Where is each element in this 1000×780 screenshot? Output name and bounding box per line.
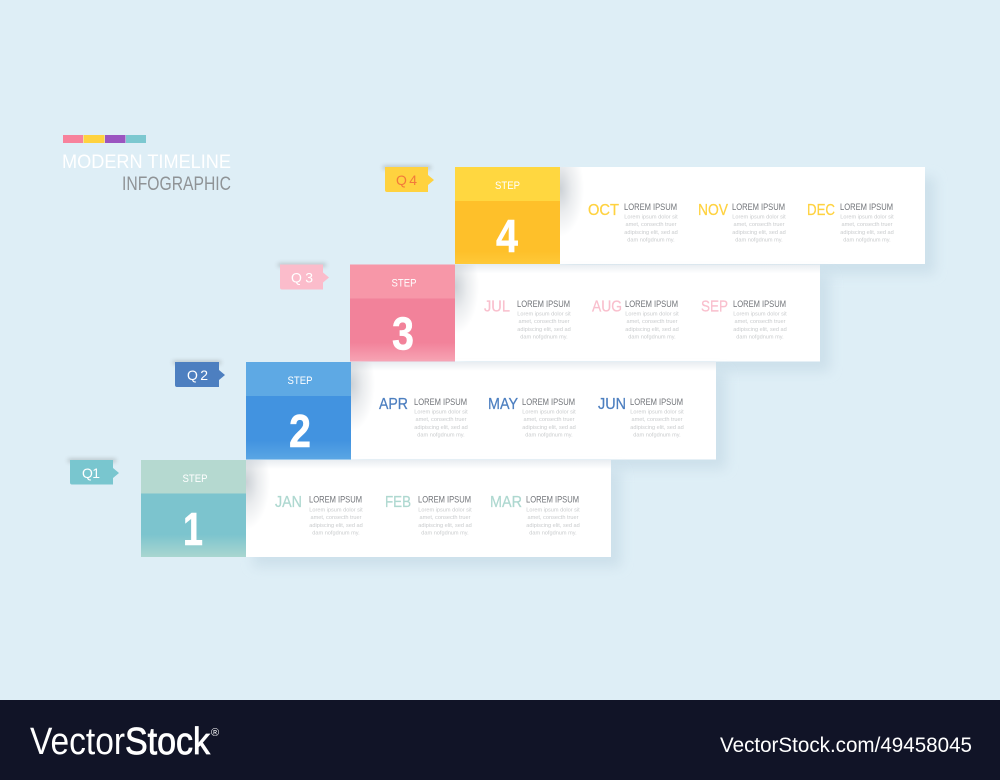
month: March: amet, consecth truer <box>528 515 579 521</box>
month: November: amet, consecth truer <box>734 222 785 228</box>
month: January: Lorem ipsum dolor sit <box>309 508 363 514</box>
month: July: LOREM IPSUM <box>517 299 570 309</box>
month: December: DEC <box>807 202 835 219</box>
month: July: adipiscing elit, sed ad <box>517 327 571 333</box>
month: October: dam nofgdnum my. <box>627 238 675 244</box>
step box shadow <box>560 167 580 228</box>
month: June: amet, consecth truer <box>632 417 683 423</box>
month: January: JAN <box>275 494 302 511</box>
month: February: dam nofgdnum my. <box>421 530 469 536</box>
month: September: Lorem ipsum dolor sit <box>733 312 787 318</box>
top edge shadow <box>246 460 611 469</box>
month: August: LOREM IPSUM <box>625 299 678 309</box>
month: July: Lorem ipsum dolor sit <box>517 312 571 318</box>
month: January: amet, consecth truer <box>310 515 362 521</box>
panel shadow <box>253 470 621 567</box>
month: December: amet, consecth truer <box>842 222 893 228</box>
white card <box>455 264 820 362</box>
footer image id: VectorStock.com/49458045 <box>720 734 972 757</box>
subheading: INFOGRAPHIC <box>122 173 231 195</box>
quarter tag <box>383 166 434 192</box>
month: July <box>484 298 571 340</box>
month: April: adipiscing elit, sed ad <box>414 425 468 431</box>
month: May: Lorem ipsum dolor sit <box>522 410 576 416</box>
month: October: amet, consecth truer <box>626 222 677 228</box>
month: July: dam nofgdnum my. <box>520 334 568 340</box>
step box shadow <box>455 264 474 325</box>
month: February: Lorem ipsum dolor sit <box>418 508 472 514</box>
month: July: amet, consecth truer <box>518 319 570 325</box>
footer logo: Vector <box>30 721 125 763</box>
quarter tag <box>68 459 119 484</box>
step label block <box>246 362 351 396</box>
month: September: adipiscing elit, sed ad <box>733 327 787 333</box>
month: October: adipiscing elit, sed ad <box>624 230 678 236</box>
quarter tag <box>278 264 329 290</box>
panel: step 2 Q2 <box>172 359 726 469</box>
step label block: STEP <box>495 180 520 192</box>
month: February: LOREM IPSUM <box>418 494 471 504</box>
month: June: JUN <box>598 396 626 413</box>
month: June: LOREM IPSUM <box>630 397 683 407</box>
month: October: LOREM IPSUM <box>624 202 677 212</box>
month: January: adipiscing elit, sed ad <box>309 523 363 529</box>
colour key bars <box>63 135 146 143</box>
month: June: adipiscing elit, sed ad <box>630 425 684 431</box>
step number block <box>246 396 351 460</box>
month: November: Lorem ipsum dolor sit <box>732 214 786 220</box>
month: October <box>588 202 678 244</box>
white card <box>351 362 716 460</box>
step box shadow <box>246 460 266 520</box>
month: November: LOREM IPSUM <box>732 202 785 212</box>
month: July: JUL <box>484 298 510 316</box>
month: August: dam nofgdnum my. <box>628 334 676 340</box>
quarter tag: Q2 <box>187 367 208 383</box>
month: May: amet, consecth truer <box>524 417 575 423</box>
title block <box>62 135 231 195</box>
month: May: dam nofgdnum my. <box>525 432 573 438</box>
month: March: MAR <box>490 494 522 511</box>
month: March <box>490 494 580 536</box>
month: September <box>701 298 787 340</box>
month: May: adipiscing elit, sed ad <box>522 425 576 431</box>
month: February: FEB <box>385 494 411 511</box>
white card <box>560 167 925 264</box>
step label block <box>455 167 560 201</box>
step label block <box>141 460 246 494</box>
month: February: amet, consecth truer <box>420 515 471 521</box>
panel shadow <box>358 372 726 469</box>
step number block <box>350 298 455 362</box>
month: November: NOV <box>698 202 728 219</box>
month: August: amet, consecth truer <box>626 319 678 325</box>
step number block: 1 <box>183 503 203 555</box>
month: August: AUG <box>592 298 622 316</box>
month: December: Lorem ipsum dolor sit <box>840 214 894 220</box>
month: April: Lorem ipsum dolor sit <box>414 410 468 416</box>
white card <box>246 460 611 557</box>
step number block <box>455 201 560 264</box>
panel: step 3 Q3 <box>277 262 830 372</box>
footer bar <box>0 700 1000 780</box>
month: April: amet, consecth truer <box>416 417 467 423</box>
step number block: 2 <box>289 405 311 457</box>
heading: MODERN TIMELINE <box>62 151 231 173</box>
month: March: LOREM IPSUM <box>526 494 579 504</box>
step number block: 4 <box>496 210 518 262</box>
month: September: SEP <box>701 298 728 316</box>
quarter tag: Q4 <box>396 172 417 188</box>
step box shadow <box>351 362 370 422</box>
panel shadow <box>567 177 935 274</box>
month: September: dam nofgdnum my. <box>736 334 784 340</box>
month: June: dam nofgdnum my. <box>633 432 681 438</box>
month: April: dam nofgdnum my. <box>417 432 465 438</box>
quarter tag: Q1 <box>82 465 100 481</box>
month: November: adipiscing elit, sed ad <box>732 230 786 236</box>
step label block: STEP <box>392 278 416 290</box>
month: December: LOREM IPSUM <box>840 202 893 212</box>
panel: step 4 Q4 <box>382 164 935 274</box>
month: May: MAY <box>488 396 518 413</box>
month: April <box>379 396 468 438</box>
month: October: Lorem ipsum dolor sit <box>624 214 678 220</box>
month: September: LOREM IPSUM <box>733 299 786 309</box>
step label block <box>350 264 455 298</box>
footer logo: ® <box>211 727 219 739</box>
step number block <box>141 494 246 557</box>
month: December: dam nofgdnum my. <box>843 238 891 244</box>
month: March: adipiscing elit, sed ad <box>526 523 580 529</box>
month: March: dam nofgdnum my. <box>529 530 577 536</box>
month: January <box>275 494 363 536</box>
step label block: STEP <box>182 473 208 485</box>
month: February: adipiscing elit, sed ad <box>418 523 472 529</box>
quarter tag: Q3 <box>291 270 313 286</box>
top edge shadow <box>455 264 820 274</box>
quarter tag <box>173 361 225 387</box>
month: November: dam nofgdnum my. <box>735 238 783 244</box>
month: January: dam nofgdnum my. <box>312 530 360 536</box>
month: December: adipiscing elit, sed ad <box>840 230 894 236</box>
month: May <box>488 396 576 438</box>
footer logo <box>30 721 219 763</box>
month: February <box>385 494 472 536</box>
step number block: 3 <box>392 308 414 360</box>
panel: step 1 Q1 <box>67 457 621 567</box>
month: October: OCT <box>588 202 619 219</box>
month: April: APR <box>379 396 408 413</box>
month: December <box>807 202 894 244</box>
footer logo: Stock <box>125 721 211 763</box>
month: August: adipiscing elit, sed ad <box>625 327 679 333</box>
month: June: Lorem ipsum dolor sit <box>630 410 684 416</box>
top edge shadow <box>351 362 716 371</box>
month: June <box>598 396 684 438</box>
month: May: LOREM IPSUM <box>522 397 575 407</box>
month: March: Lorem ipsum dolor sit <box>526 508 580 514</box>
month: April: LOREM IPSUM <box>414 397 467 407</box>
month: August <box>592 298 679 340</box>
month: January: LOREM IPSUM <box>309 494 362 504</box>
panel shadow <box>462 274 830 372</box>
month: September: amet, consecth truer <box>734 319 786 325</box>
month: November <box>698 202 786 244</box>
step label block: STEP <box>288 375 312 387</box>
month: August: Lorem ipsum dolor sit <box>625 312 679 318</box>
